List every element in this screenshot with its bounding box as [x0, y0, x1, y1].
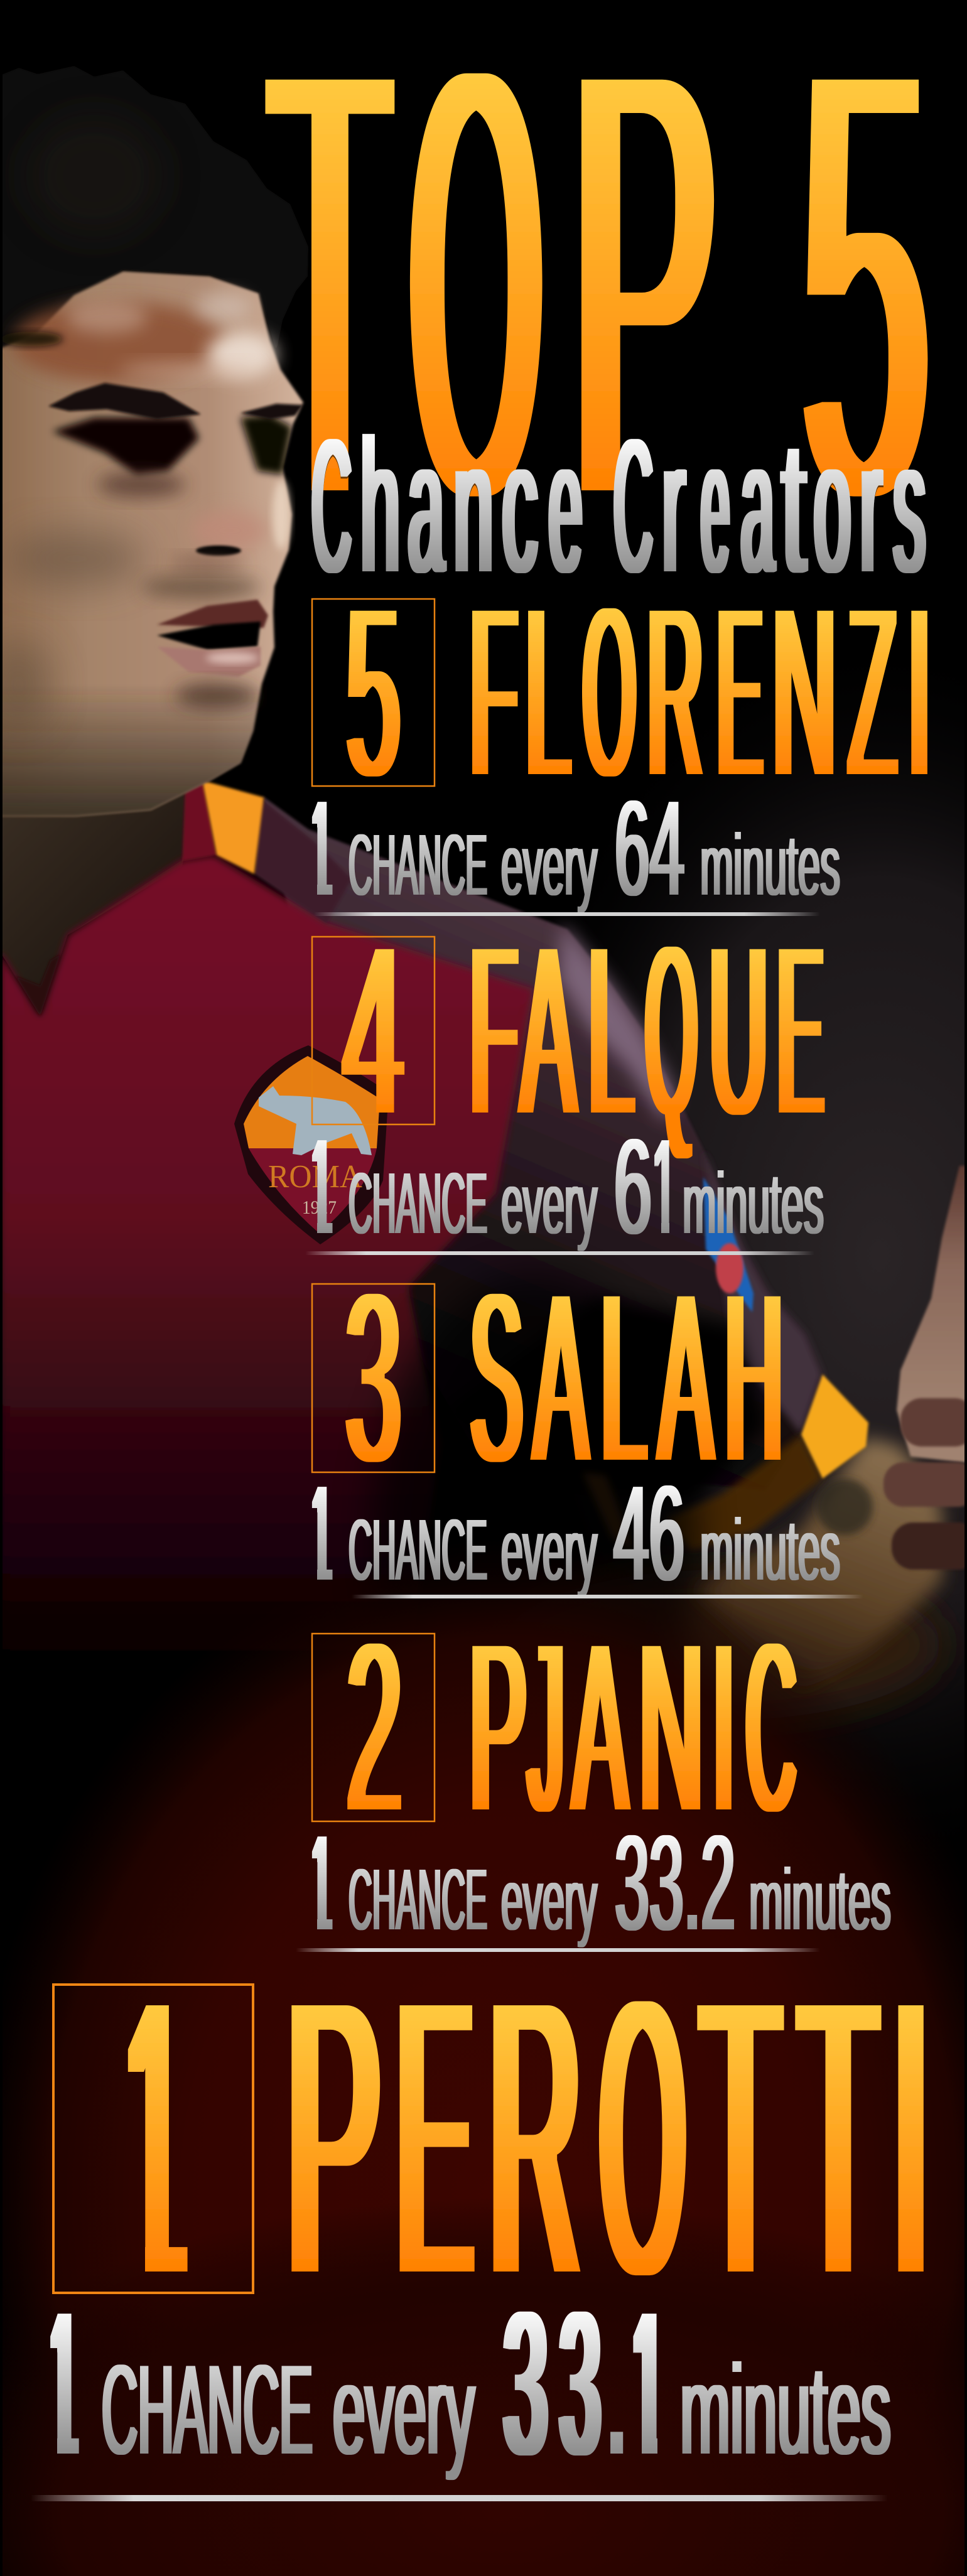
stat line: 1: [312, 772, 331, 924]
entry 2: Pjanic: 2: [347, 1592, 402, 1863]
stubble left: [0, 640, 50, 728]
sleeve collar: [254, 799, 352, 923]
face: [0, 271, 303, 816]
stat line: 1: [652, 1111, 677, 1262]
crest wolf: [259, 1086, 372, 1155]
ROMA crest: [234, 1045, 389, 1244]
sleeve near cuff: [704, 1150, 823, 1435]
name: P: [470, 1592, 526, 1863]
brow ridge highlight: [119, 362, 257, 379]
name: O: [583, 557, 635, 828]
stat line: CHANCE: [348, 817, 487, 913]
stat line: CHANCE: [348, 1155, 487, 1252]
stat line: [51, 2270, 891, 2497]
background glow: red lower area: [0, 1507, 967, 2576]
subtitle: Chance Creators: C: [312, 400, 351, 612]
entry 5: Florenzi: [312, 557, 930, 924]
stat value: 3: [504, 2270, 547, 2497]
name: P: [287, 1917, 381, 2358]
stat line: 1: [312, 1111, 331, 1262]
lower lip: [157, 647, 261, 677]
entry 5: Florenzi: 5: [347, 557, 400, 828]
subtitle: Chance Creators: c: [502, 400, 538, 612]
brow left: [48, 383, 201, 419]
subtitle: Chance Creators: e: [549, 400, 582, 612]
divider: [314, 912, 820, 916]
subtitle: Chance Creators: r: [860, 400, 882, 612]
stat line: 46: [613, 1457, 684, 1609]
entry 1: Perotti: [31, 1917, 928, 2501]
rank box 4: [312, 937, 435, 1124]
orange collar: [202, 780, 264, 874]
name: N: [772, 557, 836, 828]
stat line: 1: [51, 2270, 76, 2497]
stat line: 64: [615, 772, 684, 924]
sleeve badge centre: [716, 1243, 743, 1293]
stat line: every: [501, 1851, 597, 1948]
chest jersey: [0, 855, 534, 1727]
stat line: every: [501, 1502, 597, 1598]
forearm: [693, 1438, 942, 1691]
subtitle: Chance Creators: n: [454, 400, 493, 612]
stat line: [312, 1807, 891, 1958]
nostril: [196, 546, 241, 556]
subtitle: Chance Creators: t: [782, 400, 806, 612]
entry 3: Salah: [312, 1242, 863, 1609]
hair sheen: [25, 113, 163, 239]
lower lip highlight: [206, 652, 259, 664]
name: L: [589, 895, 634, 1167]
eye socket right: [240, 414, 292, 475]
rank box 1: [53, 1985, 253, 2293]
rank box 5: [312, 599, 435, 786]
name: A: [659, 1242, 713, 1514]
name: A: [534, 1242, 588, 1514]
name: O: [601, 1917, 684, 2358]
stat line: 33.2: [615, 1807, 735, 1958]
divider: [352, 1595, 863, 1598]
sleeve highlight: [559, 923, 676, 1124]
background glow: red bottom band: [0, 2135, 967, 2576]
forehead highlight: [207, 332, 276, 377]
brow right: [240, 404, 303, 419]
below-lip shadow: [176, 683, 257, 708]
name: F: [470, 557, 517, 828]
entry 2: Pjanic: C: [746, 1592, 796, 1863]
sleeve: [262, 796, 823, 1490]
stat value: .: [613, 2270, 620, 2497]
upper lip: [157, 600, 268, 628]
divider: [31, 2495, 888, 2501]
stat line: 1: [312, 1457, 331, 1609]
stat value: 6: [614, 1111, 652, 1262]
divider: [296, 1948, 820, 1952]
palm: [897, 1166, 967, 1463]
subtitle: Chance Creators: C: [614, 400, 652, 612]
mustache: [141, 576, 261, 598]
crest orange field: [244, 1056, 380, 1148]
subtitle: Chance Creators: a: [741, 400, 774, 612]
tattoo: [816, 1479, 873, 1535]
entry 4: Falque: [305, 895, 824, 1262]
stat line: [312, 1457, 840, 1609]
hair curl: [0, 331, 63, 347]
entry 3: Salah: 3: [346, 1242, 401, 1514]
entry 3: Salah: H: [725, 1242, 782, 1514]
hair: [0, 66, 308, 358]
collar V: [16, 954, 60, 1016]
name: I: [714, 1592, 733, 1863]
stat line: [311, 1139, 824, 1251]
rank box 2: [312, 1634, 435, 1821]
crest name: ROMA: [268, 1159, 362, 1195]
name: L: [602, 1242, 646, 1514]
jaw shadow: [0, 684, 264, 816]
entry 4: Falque: 4: [343, 895, 403, 1167]
name: A: [521, 895, 576, 1167]
name: S: [470, 1242, 522, 1514]
photo: player: [0, 66, 967, 1802]
forehead sweat highlights right: [195, 293, 251, 323]
inner collar: [182, 782, 217, 861]
stat line: CHANCE: [102, 2339, 313, 2481]
crest shield: [234, 1045, 389, 1244]
under-eye shadow: [97, 472, 185, 497]
text: E: [777, 895, 823, 1167]
eye socket left: [52, 418, 199, 475]
name: A: [573, 1592, 628, 1863]
name: E: [397, 1917, 472, 2358]
name: J: [528, 1592, 564, 1863]
chest shadow: [370, 1275, 697, 1802]
subtitle: Chance Creators: a: [408, 400, 444, 612]
stat line: every: [501, 817, 597, 913]
stat line: CHANCE: [348, 1851, 487, 1948]
subtitle: Chance Creators: r: [662, 400, 685, 612]
far cheek light: [273, 480, 290, 549]
nose pink: [192, 510, 267, 551]
name: F: [470, 895, 517, 1167]
name: N: [639, 1592, 703, 1863]
stat line: 1: [633, 2270, 663, 2497]
divider: [305, 1251, 814, 1255]
nose shadow: [170, 556, 245, 571]
cuff lower piece: [583, 1472, 634, 1551]
name: R: [490, 1917, 580, 2358]
forehead sweat highlights: [66, 301, 148, 333]
cuff shadow band: [666, 1435, 823, 1551]
stat line: 1: [312, 1807, 331, 1958]
name: R: [647, 557, 703, 828]
stat line: every: [501, 1155, 597, 1252]
forehead tan: [13, 301, 226, 383]
fingers: [883, 1398, 967, 1570]
subtitle: Chance Creators: h: [360, 400, 400, 612]
stat value: 3: [560, 2270, 600, 2497]
stat line: every: [333, 2339, 475, 2481]
stat line: CHANCE: [348, 1502, 487, 1598]
background glow: grey right side: [440, 628, 967, 1883]
subtitle: Chance Creators: o: [814, 400, 851, 612]
entry 2: Pjanic: [296, 1592, 891, 1958]
name: U: [710, 895, 767, 1167]
crest maroon field: [249, 1148, 377, 1233]
sleeve fold shadow: [440, 1296, 766, 1507]
lower forearm glow: [502, 1570, 942, 1720]
name: L: [526, 557, 570, 828]
entry 1: Perotti: 1: [124, 1917, 186, 2358]
subtitle: Chance Creators: e: [701, 400, 729, 612]
sleeve badge: [703, 1177, 754, 1312]
cheek shading: [6, 531, 144, 587]
name: E: [717, 557, 762, 828]
cuff: [801, 1374, 868, 1479]
name: T: [701, 1917, 780, 2358]
name: Q: [646, 895, 697, 1167]
mouth: [157, 622, 261, 650]
stat line: [311, 800, 840, 912]
rank box 3: [312, 1284, 435, 1472]
neck: [0, 741, 207, 1016]
crest year: 1927: [302, 1197, 337, 1218]
